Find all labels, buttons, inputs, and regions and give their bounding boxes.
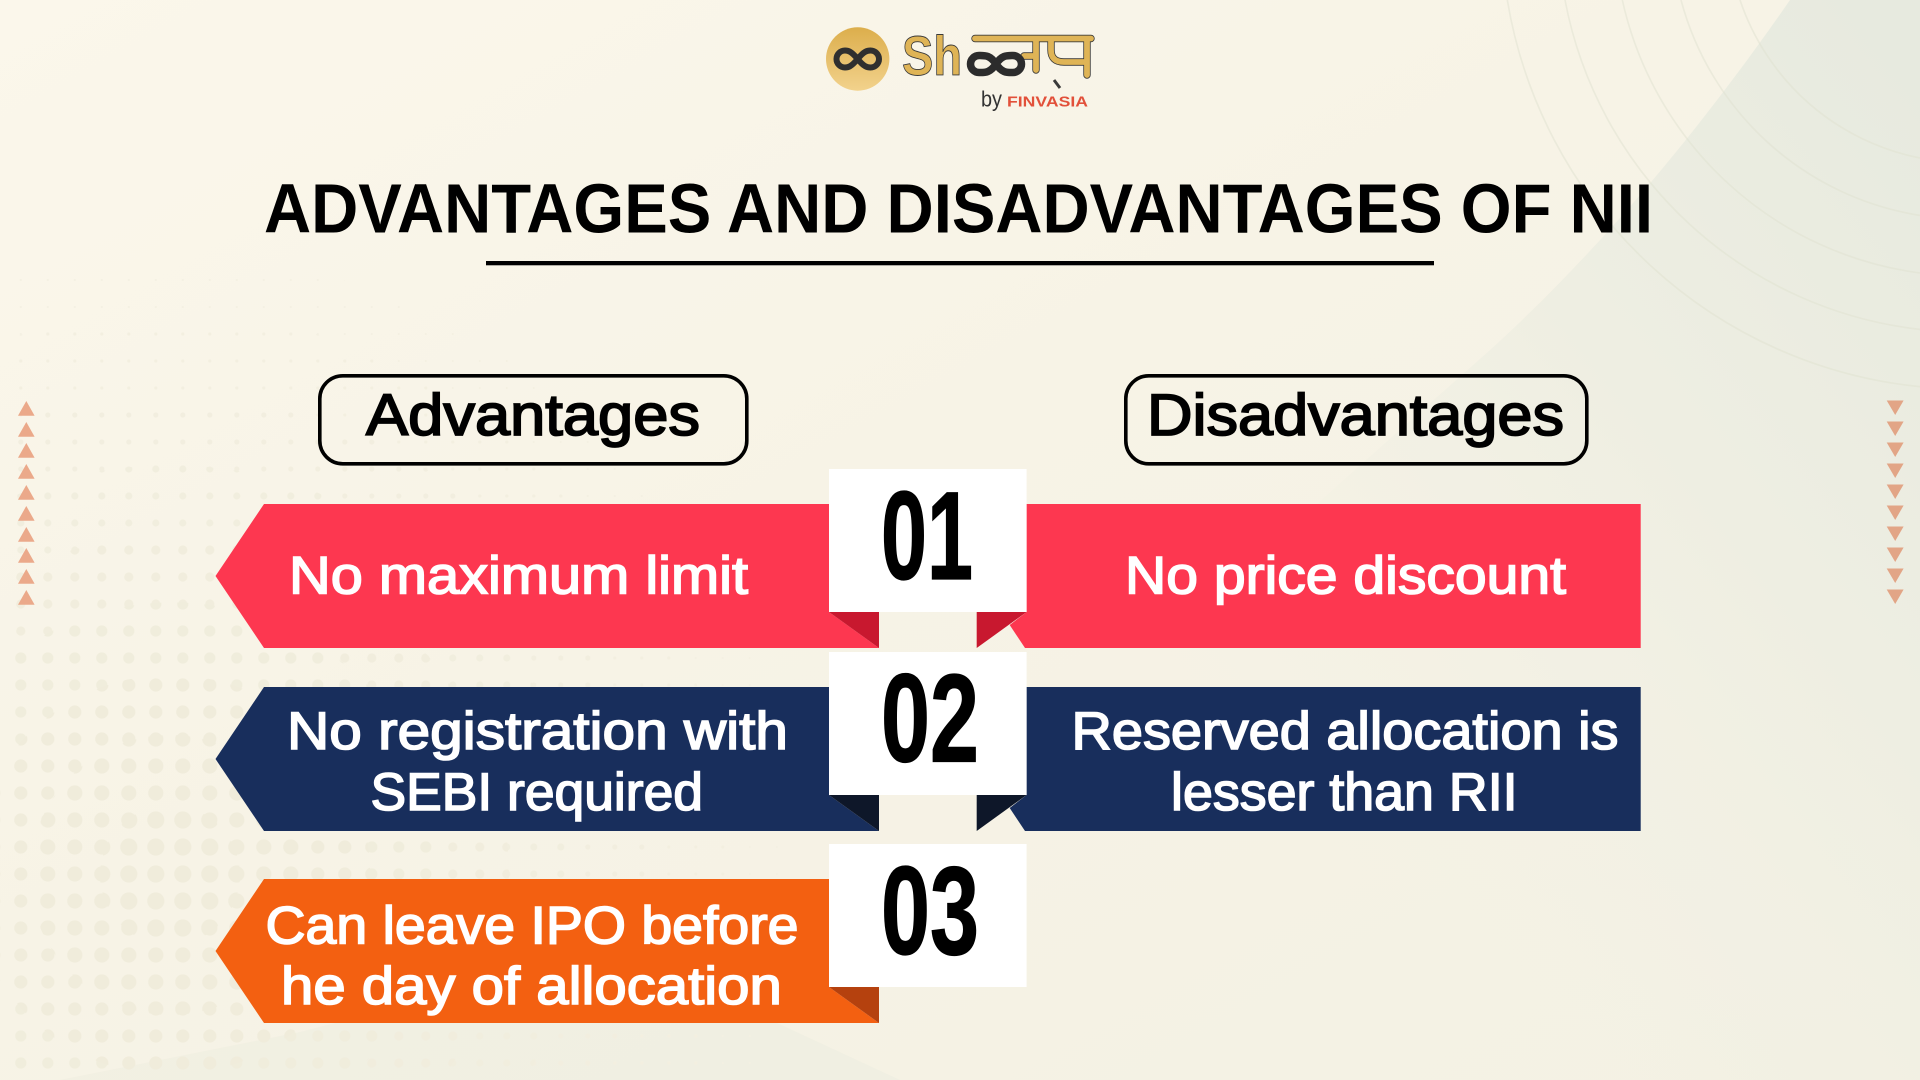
- heading: Disadvantages: Disadvantages: [1147, 383, 1564, 448]
- advantage 1: red banner: No maximum limit: [289, 546, 748, 605]
- halftone dot pattern: [0, 255, 790, 1080]
- number box 01: [829, 467, 1027, 612]
- advantage 2: navy banner: SEBI required: [370, 763, 703, 822]
- logo: Shoonya by Finvasia: [826, 24, 1091, 112]
- logo wordmark: Sh: [902, 24, 962, 87]
- disadvantage 2: navy banner: lesser than RII: [1171, 763, 1518, 822]
- disadvantage 2: navy banner: Reserved allocation is: [1072, 702, 1618, 761]
- advantage 3: orange banner: Can leave IPO before: [266, 896, 798, 955]
- number box 02: [829, 650, 1027, 795]
- disadvantage 2: navy banner: [977, 687, 1641, 831]
- number box 01: 01: [881, 467, 973, 606]
- number box 02: 02: [881, 650, 979, 789]
- icon: wordmark infinity and headline strokes: [970, 38, 1091, 88]
- title: ADVANTAGES AND DISADVANTAGES OF NII: [264, 170, 1653, 248]
- advantage 2: navy banner: No registration with: [287, 702, 788, 761]
- advantage 3: orange banner: [216, 879, 879, 1023]
- advantage 3: orange banner: he day of allocation: [281, 957, 782, 1016]
- icon: gold infinity badge: [826, 27, 889, 91]
- number box 03: [829, 842, 1027, 987]
- logo byline: by: [981, 87, 1002, 112]
- heading: Disadvantages: [1126, 376, 1587, 464]
- disadvantage 1: red banner: No price discount: [1125, 546, 1566, 605]
- advantage 1: red banner: [216, 504, 879, 648]
- logo Finvasia: FINVASIA: [1007, 94, 1088, 111]
- title underline: [486, 261, 1434, 265]
- heading: Advantages: Advantages: [366, 383, 700, 448]
- heading: Advantages: [320, 376, 747, 464]
- number box 03: 03: [881, 842, 979, 981]
- icon: left up-arrow triangles: [18, 401, 35, 605]
- icon: right down-arrow triangles: [1887, 400, 1904, 604]
- advantage 2: navy banner: [216, 687, 879, 831]
- disadvantage 1: red banner: [977, 504, 1641, 648]
